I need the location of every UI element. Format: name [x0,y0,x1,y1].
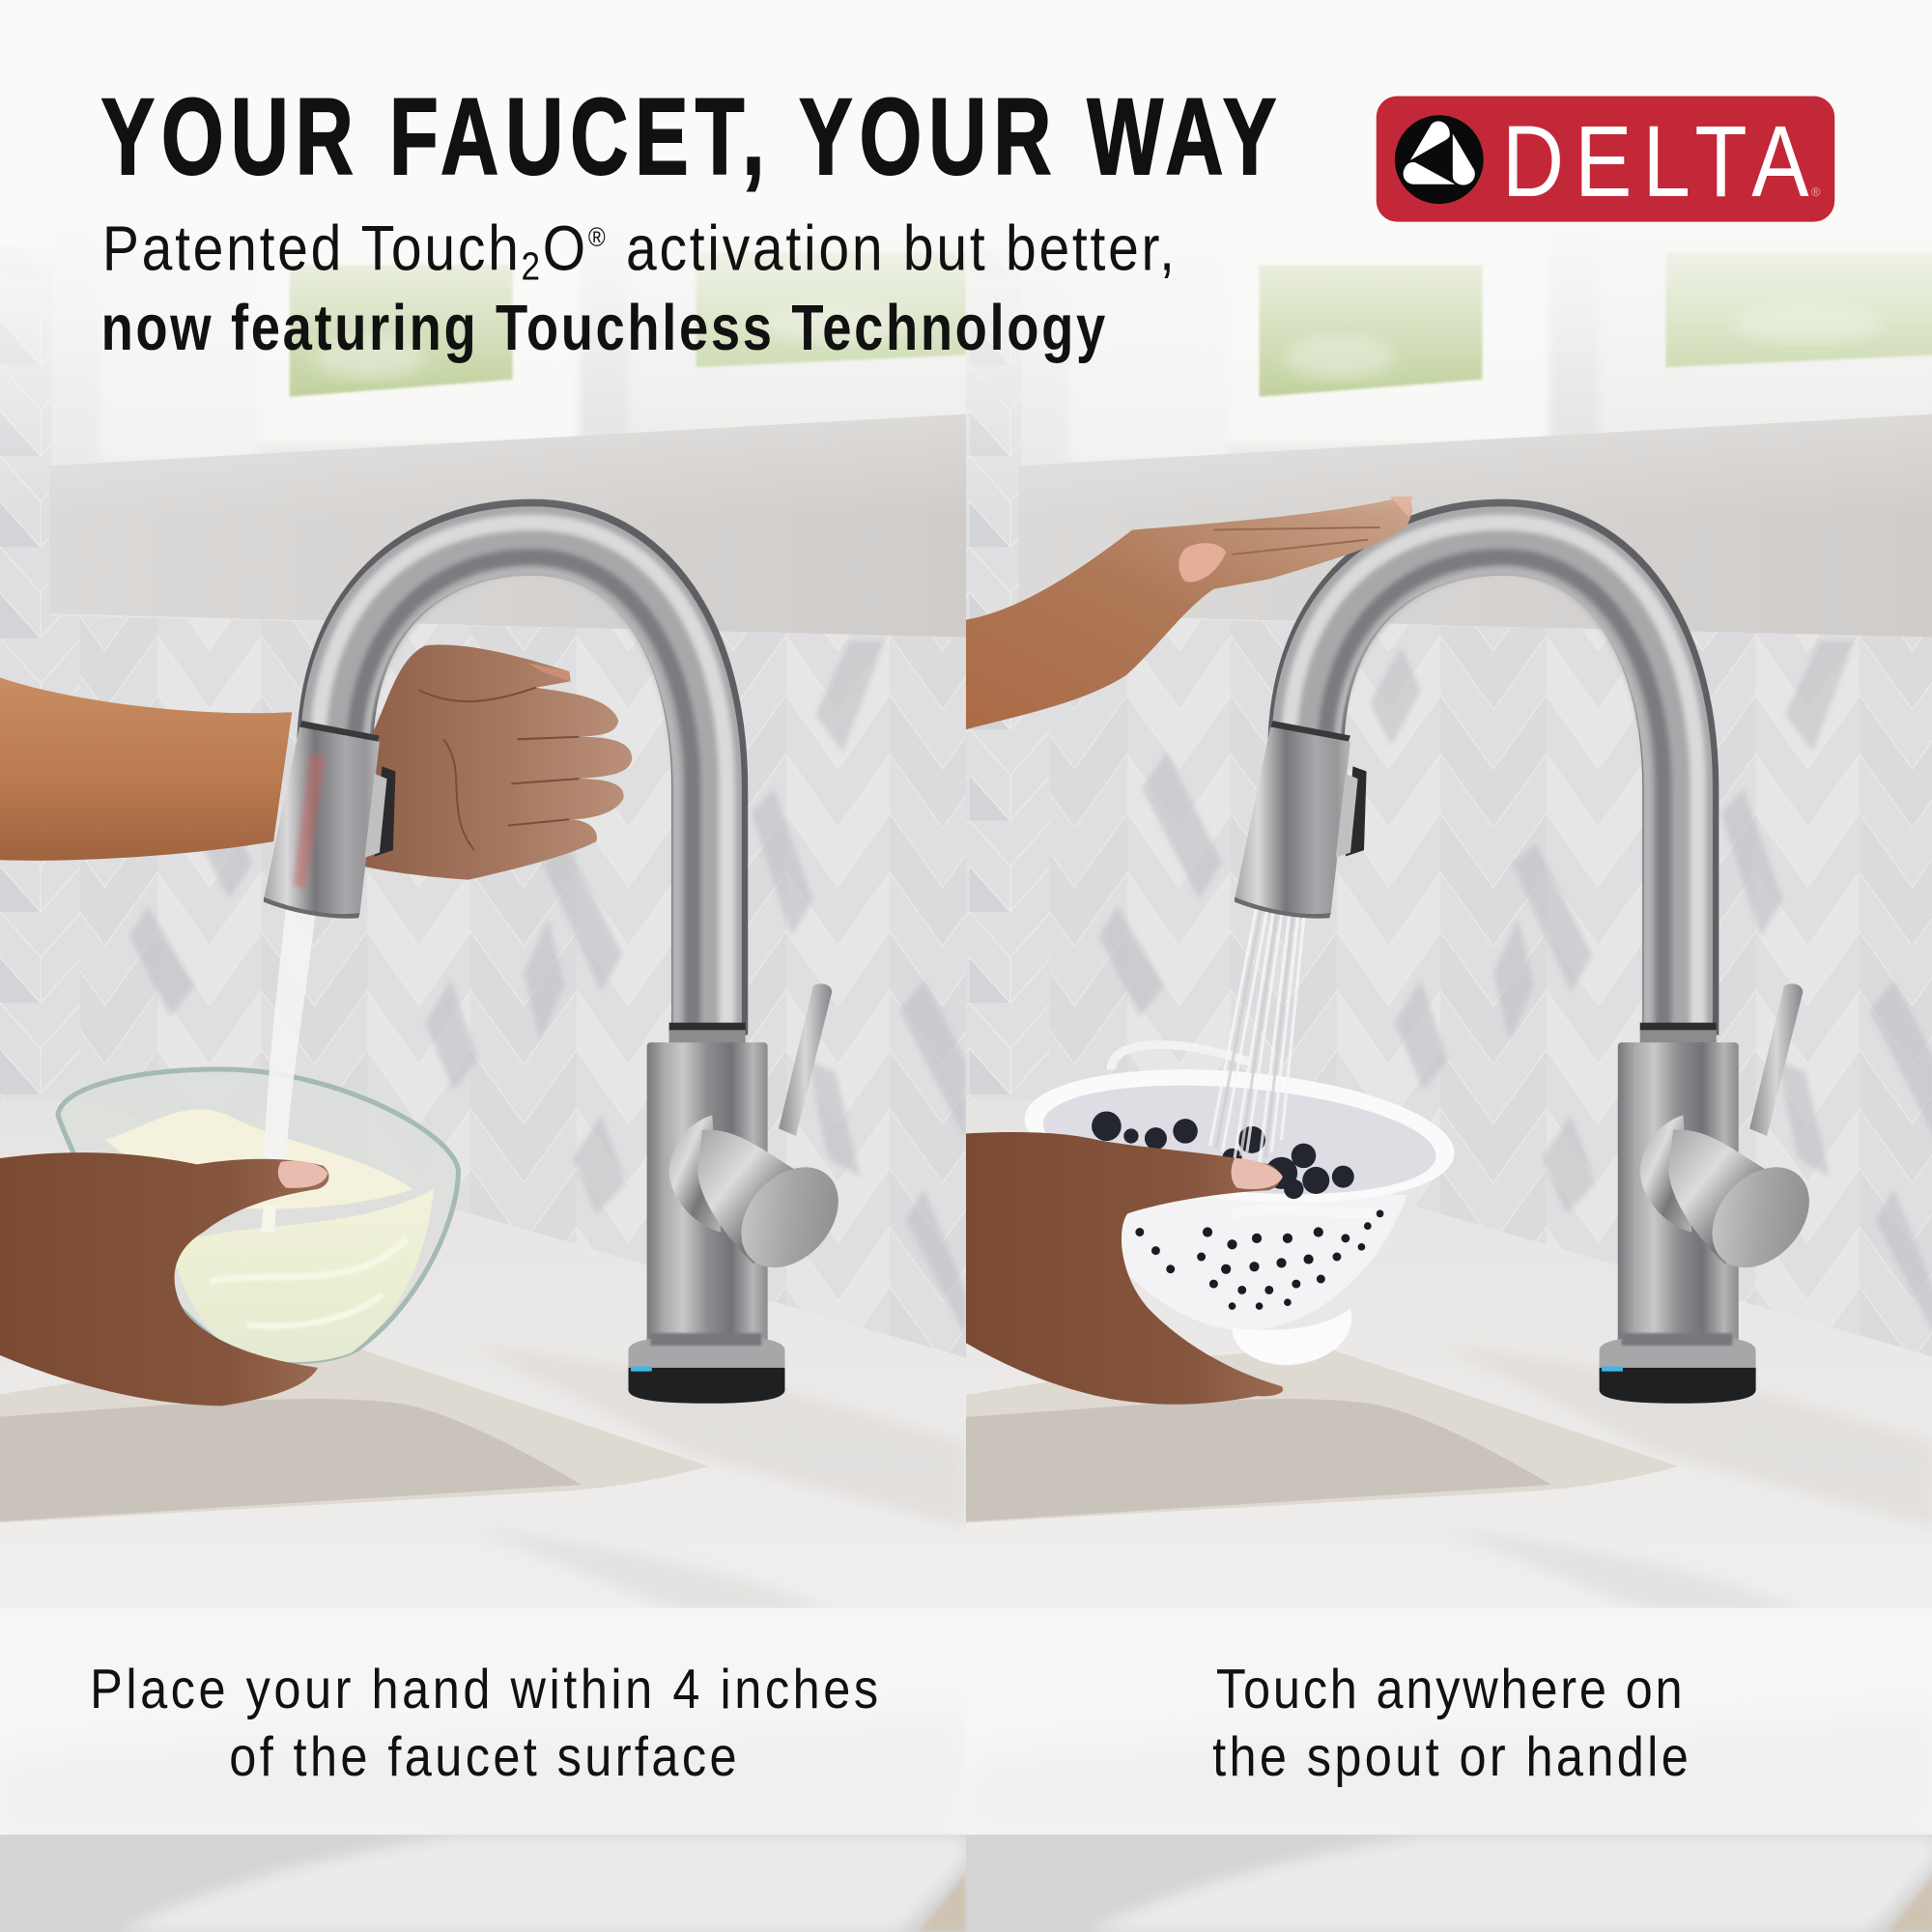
left caption [90,1659,878,1788]
right caption [1212,1659,1689,1788]
logo: Delta [1377,96,1834,222]
glass bowl with batter [58,1069,458,1362]
title: YOUR FAUCET, YOUR WAY [101,76,1276,197]
logo emblem [1395,115,1484,204]
water stream from faucet [264,909,316,1164]
background: left photo panel scene [0,0,966,1932]
right upper hand touching spout [966,497,1412,729]
left caption: Place your hand within 4 inches [90,1659,878,1720]
faucet, right panel [1235,523,1829,1404]
logo wordmark: DELTA [1502,104,1809,217]
subtitle line 1: activation but better, [608,213,1175,284]
registered mark: ® [1811,185,1821,199]
red reflection on sprayer head [294,754,326,890]
right caption: the spout or handle [1212,1726,1689,1788]
background: right photo panel scene [966,0,1932,1932]
faucet, left panel [264,523,858,1404]
top fade overlay [0,0,1932,518]
lower left hand holding bowl [0,1152,328,1406]
subtitle line 1: Patented Touch [102,213,519,284]
left caption: of the faucet surface [229,1726,737,1788]
water spray from faucet [1210,906,1305,1164]
subtitle line 1: 2 [522,245,540,289]
right caption: Touch anywhere on [1216,1659,1683,1720]
colander with berries [1019,1044,1460,1365]
right lower hand holding colander [966,1132,1283,1405]
left open hand near faucet [357,645,632,880]
subtitle line 1: ® [588,221,606,253]
left arm reaching behind faucet [0,678,292,861]
subtitle line 1: O [543,213,585,284]
water below thumb [261,1205,276,1233]
subtitle line 2: now featuring Touchless Technology [101,292,1105,363]
